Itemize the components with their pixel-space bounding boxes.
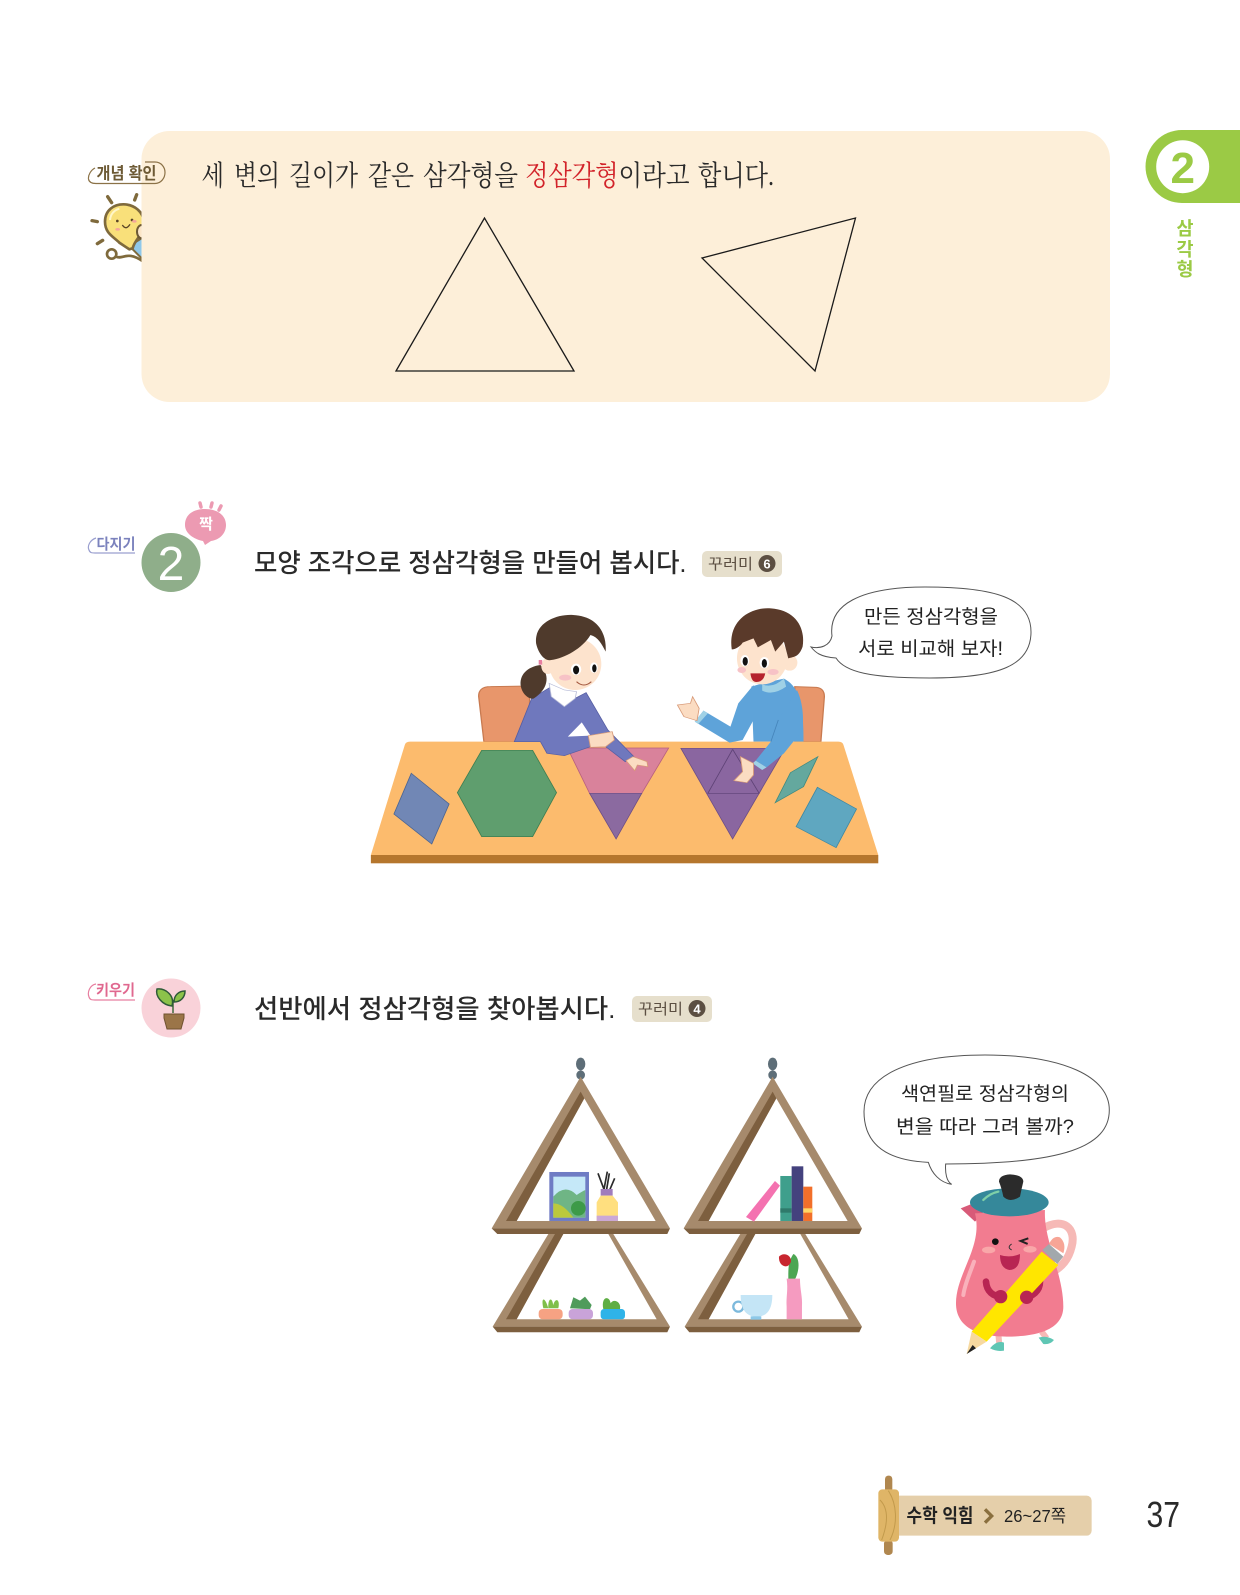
chapter title vertical: 삼 <box>1176 218 1194 239</box>
icon: pink bubble 짝 <box>185 503 226 545</box>
tag: 꾸러미 6 <box>702 551 782 577</box>
chairs <box>479 686 824 742</box>
chapter tab <box>1146 130 1240 203</box>
tag: 꾸러미 4: 4 <box>693 1002 701 1016</box>
speech bubble: boy <box>811 587 1031 678</box>
tag: 꾸러미 6: 꾸러미 <box>708 556 753 573</box>
chapter number: 2 <box>1170 144 1195 193</box>
text: definition of equilateral triangle: 변의 <box>234 160 280 192</box>
icon: number 2 circle <box>142 533 200 592</box>
tag: 꾸러미 4 <box>632 996 712 1022</box>
table <box>371 742 878 863</box>
left shelf unit <box>492 1058 670 1332</box>
books <box>746 1166 812 1222</box>
footer tag: 수학 익힘: 26~27쪽 <box>1004 1506 1066 1526</box>
chapter title vertical <box>1176 218 1194 280</box>
triangle: rotated equilateral <box>702 218 856 371</box>
label: 다지기: 다지기 <box>96 536 136 553</box>
text: definition of equilateral triangle: 삼각형을 <box>423 160 518 192</box>
pattern blocks <box>394 748 857 848</box>
panel: concept box <box>142 131 1110 402</box>
page number: 37 <box>1146 1494 1180 1535</box>
vase with tulip <box>779 1254 802 1319</box>
tag: 꾸러미 4: 꾸러미 <box>638 1001 683 1018</box>
diffuser bottle <box>597 1172 618 1221</box>
speech bubble: pitcher: 색연필로 정삼각형의 <box>901 1083 1069 1105</box>
framed picture <box>549 1172 589 1221</box>
speech bubble: pitcher <box>864 1055 1109 1184</box>
triangle: equilateral <box>396 218 574 371</box>
icon: plant circle <box>142 978 200 1038</box>
girl <box>514 615 648 771</box>
potted plants <box>539 1297 625 1319</box>
chapter title vertical: 형 <box>1176 259 1194 280</box>
text: definition of equilateral triangle: 이라고 <box>618 160 690 192</box>
text: definition of equilateral triangle <box>202 160 774 192</box>
heading: activity 3: 선반에서 정삼각형을 찾아봅시다. <box>254 994 616 1024</box>
label: 키우기: 키우기 <box>96 982 135 999</box>
tag: 꾸러미 6: 6 <box>763 556 771 572</box>
text: definition of equilateral triangle: 세 <box>202 160 224 192</box>
icon: number 2 circle: 2 <box>158 538 184 591</box>
icon: light bulb character <box>92 195 147 263</box>
rolling pin <box>878 1476 1092 1555</box>
speech bubble: pitcher: 변을 따라 그려 볼까? <box>896 1116 1074 1138</box>
text: definition of equilateral triangle: 합니다. <box>698 160 774 192</box>
icon: pink bubble 짝: 짝 <box>199 516 213 533</box>
text: definition of equilateral triangle: 같은 <box>368 160 414 192</box>
illustration: triangle shelves <box>492 1058 862 1332</box>
right shelf unit <box>684 1058 862 1332</box>
speech bubble: boy: 만든 정삼각형을 <box>864 606 998 628</box>
speech bubble: boy: 서로 비교해 보자! <box>858 638 1003 660</box>
boy <box>677 608 803 783</box>
label: 개념 확인: 개념 확인 <box>96 164 156 183</box>
heading: activity 2: 모양 조각으로 정삼각형을 만들어 봅시다. <box>254 548 686 578</box>
text: definition of equilateral triangle: 정삼각형 <box>525 160 618 192</box>
footer tag: 수학 익힘: 수학 익힘 <box>906 1505 974 1527</box>
boy torso <box>751 679 803 742</box>
chapter title vertical: 각 <box>1176 239 1194 260</box>
character: pink pitcher with pencil <box>956 1174 1073 1354</box>
text: definition of equilateral triangle: 길이가 <box>289 160 358 192</box>
illustration: children at table <box>371 608 878 863</box>
footer tag: 수학 익힘 <box>878 1476 1092 1555</box>
tea cup <box>733 1295 772 1320</box>
